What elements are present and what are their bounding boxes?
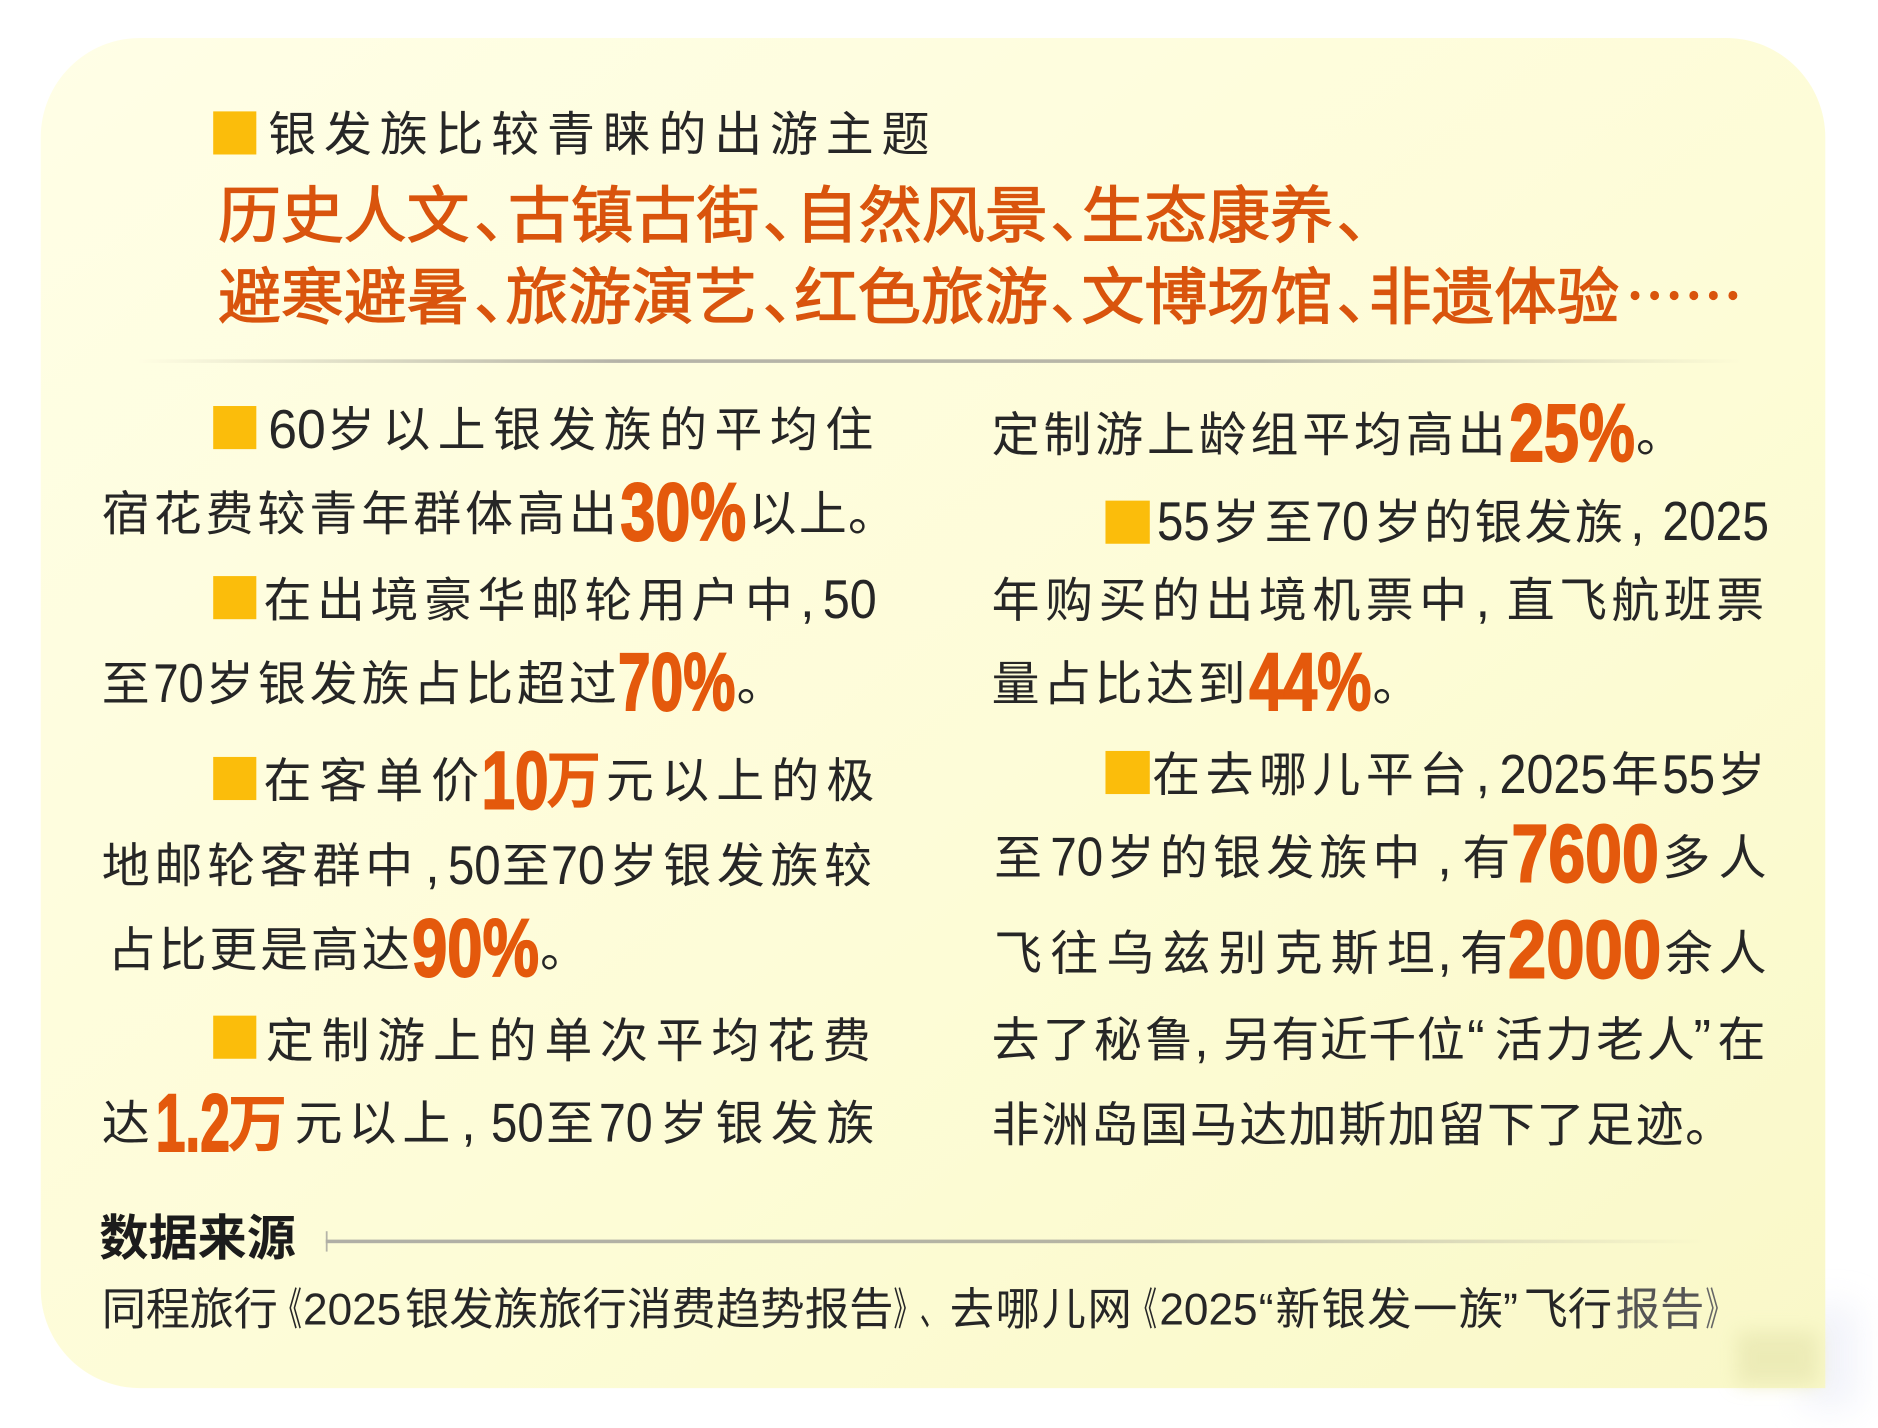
- text block: custom tours: 50: [491, 1091, 544, 1153]
- text block: Qunar destinations: ,: [1194, 1009, 1209, 1068]
- theme list in orange: 避寒避暑: [218, 248, 470, 337]
- source citation: [102, 1274, 1732, 1338]
- theme list in orange: 历史人文: [218, 166, 470, 255]
- text block: accommodation spending: 以上: [749, 475, 847, 545]
- text block: luxury cruise: 至: [102, 645, 150, 715]
- text block: accommodation spending: 。: [848, 475, 896, 545]
- stat: 10万: 10: [481, 735, 549, 826]
- text block: Qunar destinations: 在: [1717, 1000, 1765, 1070]
- text block: polar cruise: ,: [425, 836, 440, 895]
- text block: custom tours: ,: [461, 1093, 476, 1152]
- text block: Qunar destinations: 另有近千位: [1223, 1000, 1465, 1070]
- text block: Qunar destinations: 55: [1662, 743, 1715, 805]
- theme list in orange: 古镇古街: [508, 166, 759, 255]
- text block: luxury cruise: 在出境豪华邮轮用户中: [264, 561, 793, 631]
- text block: direct flights: ,: [1630, 492, 1645, 551]
- text block: polar cruise: 岁银发族较: [610, 827, 872, 897]
- heading: travel themes: 银发族比较青睐的出游主题: [268, 95, 929, 165]
- text block: Qunar destinations: 飞往乌兹别克斯坦: [994, 914, 1435, 984]
- source citation: 、: [920, 1274, 946, 1338]
- icon: yellow square marker: [213, 406, 256, 449]
- heading: data source: 数据来源: [99, 1199, 296, 1270]
- text block: polar cruise: 元以上的极: [606, 742, 874, 812]
- text block: custom tours: 岁银发族: [660, 1084, 874, 1154]
- stat: 1.2万: 万: [228, 1074, 287, 1164]
- text block: Qunar destinations: 在去哪儿平台: [1152, 736, 1467, 806]
- source citation: 银发族旅行消费趋势报告: [405, 1274, 893, 1338]
- text block: Qunar destinations: ,: [1437, 827, 1452, 886]
- text block: direct flights: 岁的银发族: [1374, 483, 1623, 553]
- text block: custom tours: 70: [599, 1091, 653, 1153]
- text block: polar cruise: 在客单价: [264, 742, 479, 812]
- source citation: 去哪儿网: [950, 1274, 1132, 1338]
- icon: yellow square marker: [1105, 751, 1150, 794]
- text block: Qunar destinations: 有: [1460, 914, 1508, 984]
- theme list in orange: 旅游演艺: [505, 248, 757, 337]
- text block: custom tours: 定制游上龄组平均高出: [992, 396, 1506, 466]
- text block: luxury cruise: [102, 561, 877, 728]
- text block: Qunar destinations: 岁的银发族中: [1107, 818, 1420, 888]
- text block: Qunar destinations: ,: [1476, 745, 1490, 804]
- stat: 30%: 30%: [620, 467, 746, 558]
- stat: 2000: 2000: [1508, 904, 1661, 995]
- text block: Qunar destinations: 去了秘鲁: [992, 1000, 1193, 1070]
- icon: yellow square marker: [213, 111, 256, 155]
- theme list in orange: 、: [1337, 166, 1398, 255]
- source citation: 《: [275, 1274, 302, 1338]
- text block: direct flights: 70: [1315, 490, 1369, 552]
- text block: custom tours: 定制游上的单次平均花费: [266, 1002, 871, 1072]
- text block: direct flights: [992, 483, 1769, 728]
- source citation: 2025: [1159, 1286, 1258, 1335]
- text block: Qunar destinations: 余人: [1665, 914, 1767, 984]
- theme list in orange: 非遗体验: [1369, 248, 1619, 337]
- text block: accommodation spending: 60: [268, 398, 326, 460]
- source citation: “: [1259, 1286, 1274, 1335]
- theme list in orange: 自然风景: [795, 166, 1048, 255]
- text block: direct flights: ,: [1476, 570, 1490, 629]
- text block: Qunar destinations: 70: [1050, 826, 1103, 888]
- text block: direct flights: 55: [1157, 490, 1210, 552]
- text block: accommodation spending: [102, 391, 896, 558]
- source citation: 报告: [1616, 1274, 1704, 1338]
- text block: Qunar destinations: 活力老人: [1495, 1000, 1695, 1070]
- theme list in orange: 、: [1050, 248, 1111, 337]
- theme list in orange: [218, 166, 1743, 337]
- text block: direct flights: 岁至: [1212, 483, 1313, 553]
- source citation: 》: [893, 1274, 920, 1338]
- text block: polar cruise: 50: [448, 834, 501, 896]
- source citation: 飞行: [1523, 1274, 1612, 1338]
- text block: Qunar destinations: 2025: [1500, 743, 1607, 805]
- theme list in orange: 、: [474, 248, 535, 337]
- text block: custom tours: 达: [102, 1084, 150, 1154]
- text block: direct flights: 直飞航班票: [1507, 561, 1764, 631]
- text block: custom tours: 。: [1636, 396, 1684, 466]
- text block: Qunar destinations: 至: [994, 818, 1042, 888]
- theme list in orange: 、: [763, 248, 824, 337]
- theme list in orange: 、: [763, 166, 824, 255]
- stat: 70%: 70%: [618, 637, 735, 728]
- text block: polar cruise: 占比更是高达: [108, 911, 410, 981]
- text block: Qunar destinations: 年: [1611, 736, 1659, 806]
- text block: custom tours: 至: [546, 1084, 594, 1154]
- source citation: 新银发一族: [1276, 1274, 1503, 1338]
- text block: custom tours: [102, 388, 1684, 1169]
- text block: luxury cruise: 。: [737, 645, 784, 715]
- text block: luxury cruise: ,: [800, 570, 815, 629]
- text block: accommodation spending: 岁以上银发族的平均住: [327, 391, 873, 461]
- text block: luxury cruise: 50: [823, 568, 877, 630]
- text block: Qunar destinations: 多人: [1662, 818, 1767, 888]
- text block: direct flights: 2025: [1662, 490, 1769, 552]
- source citation: 同程旅行: [102, 1274, 278, 1338]
- theme list in orange: 、: [1337, 248, 1398, 337]
- text block: direct flights: 年购买的出境机票中: [992, 561, 1467, 631]
- section: preferred travel themes: [213, 95, 1743, 337]
- source citation: 》: [1706, 1274, 1732, 1338]
- footer: data source: [99, 1199, 1732, 1338]
- text block: Qunar destinations: 岁: [1717, 736, 1765, 806]
- text block: custom tours: 元以上: [295, 1084, 450, 1154]
- stat: 10万: 万: [546, 730, 601, 820]
- source citation: 2025: [303, 1286, 401, 1335]
- theme list in orange: 文博场馆: [1082, 248, 1333, 337]
- theme list in orange: 、: [1050, 166, 1111, 255]
- theme list in orange: ……: [1625, 248, 1743, 337]
- text block: Qunar destinations: 非洲岛国马达加斯加留下了足迹。: [992, 1085, 1733, 1155]
- text block: Qunar destinations: [992, 736, 1767, 1155]
- text block: polar cruise: [102, 730, 874, 994]
- stat: 1.2万: 1.2: [156, 1078, 230, 1169]
- text block: accommodation spending: 宿花费较青年群体高出: [102, 475, 617, 545]
- stat: 7600: 7600: [1511, 808, 1659, 899]
- stat: 25%: 25%: [1509, 388, 1635, 479]
- text block: direct flights: 量占比达到: [992, 645, 1246, 715]
- theme list in orange: 生态康养: [1082, 166, 1333, 255]
- text block: polar cruise: 70: [551, 834, 605, 896]
- text block: polar cruise: 地邮轮客群中: [102, 827, 413, 897]
- icon: yellow square marker: [213, 576, 256, 619]
- icon: yellow square marker: [213, 757, 256, 800]
- text block: direct flights: 。: [1373, 645, 1420, 715]
- stat: 90%: 90%: [412, 903, 539, 994]
- source citation: 《: [1131, 1274, 1157, 1338]
- text block: Qunar destinations: ,: [1437, 923, 1452, 982]
- text block: polar cruise: 。: [540, 911, 588, 981]
- text block: luxury cruise: 岁银发族占比超过: [206, 645, 617, 715]
- icon: yellow square marker: [213, 1016, 256, 1059]
- theme list in orange: 红色旅游: [794, 248, 1048, 337]
- text block: Qunar destinations: 有: [1462, 818, 1510, 888]
- text block: polar cruise: 至: [502, 827, 550, 897]
- text block: Qunar destinations: “: [1467, 1009, 1485, 1068]
- theme list in orange: 、: [474, 166, 535, 255]
- source citation: ”: [1503, 1286, 1518, 1335]
- text block: Qunar destinations: ”: [1694, 1009, 1711, 1068]
- stat: 44%: 44%: [1249, 637, 1371, 728]
- icon: yellow square marker: [1105, 501, 1150, 544]
- text block: luxury cruise: 70: [153, 652, 204, 714]
